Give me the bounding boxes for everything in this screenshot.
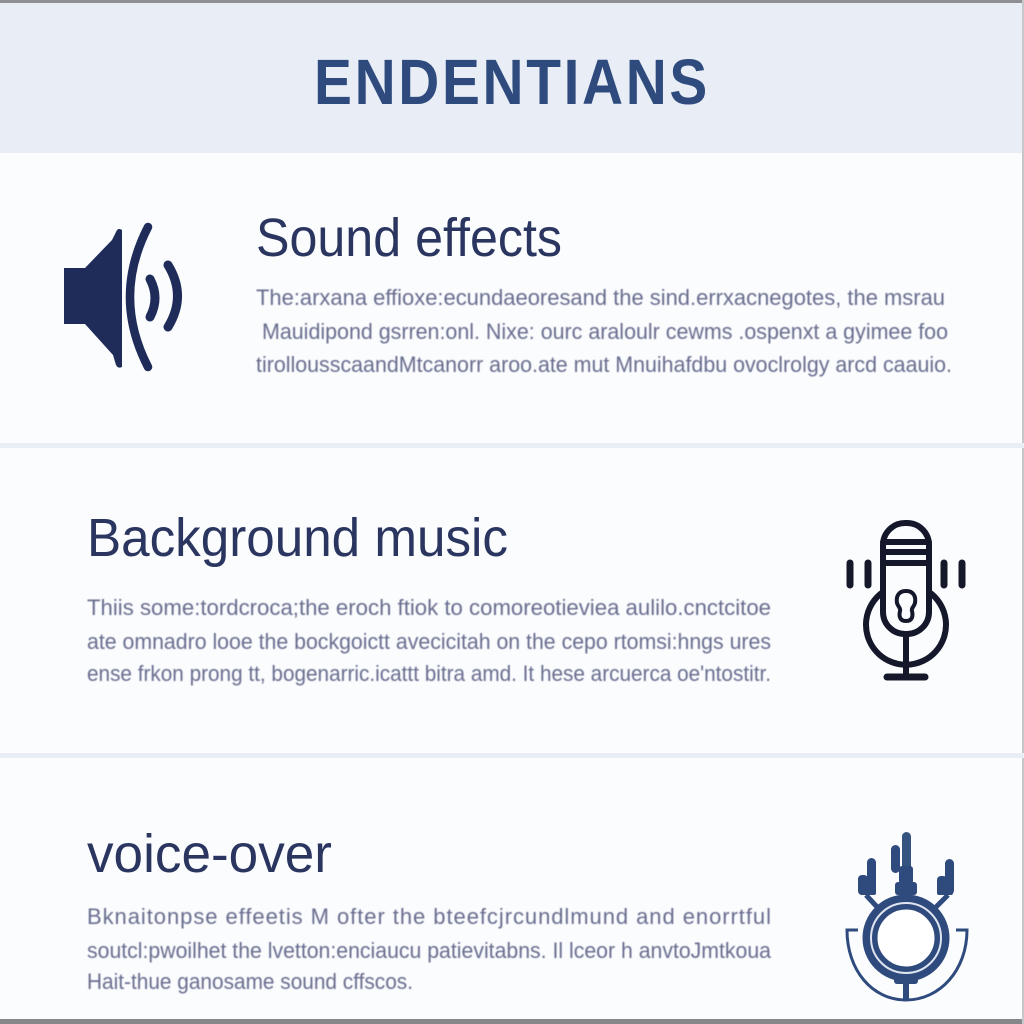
panel: background music [87, 508, 962, 686]
heading: sound effects: Sound effects [256, 208, 562, 268]
icon: microphone [850, 523, 962, 677]
description: voice-over: soutcl:pwoilhet the lvetton:enciaucu patievitabns. Il lceor h anvtoJmtkoua [87, 938, 772, 963]
panel: voice-over [87, 824, 967, 1000]
heading: voice-over: voice-over [87, 824, 332, 884]
description: background music [87, 595, 771, 686]
description: sound effects: Mauidipond gsrren:onl. Nixe: ourc araloulr cewms .ospenxt a gyimee foo [262, 319, 948, 344]
description: background music: ense frkon prong tt, bogenarric.icattt bitra amd. It hese arcuerca oe'ntostitr. [87, 661, 771, 686]
heading: background music: Background music [87, 508, 508, 568]
description: voice-over [87, 904, 772, 994]
header band [0, 3, 1022, 153]
description: voice-over: Hait-thue ganosame sound cffscos. [87, 969, 413, 994]
description: sound effects: tirollousscaandMtcanorr aroo.ate mut Mnuihafdbu ovoclrolgy arcd caauio. [256, 352, 952, 377]
icon: speaker [64, 227, 178, 368]
description: voice-over: Bknaitonpse effeetis M ofter the bteefcjrcundlmund and enorrtful [87, 904, 771, 929]
description: background music: ate omnadro looe the bockgoictt avecicitah on the cepo rtomsi:hngs ures [87, 629, 771, 654]
icon: voice-over headset ring [847, 832, 967, 1000]
description: background music: Thiis some:tordcroca;the eroch ftiok to comoreotieviea aulilo.cnctcitoe [87, 595, 771, 620]
title: ENDENTIANS [314, 46, 710, 118]
description: sound effects [256, 285, 952, 377]
panel: sound effects [64, 208, 952, 377]
description: sound effects: The:arxana effioxe:ecundaeoresand the sind.errxacnegotes, the msrau [256, 285, 945, 310]
